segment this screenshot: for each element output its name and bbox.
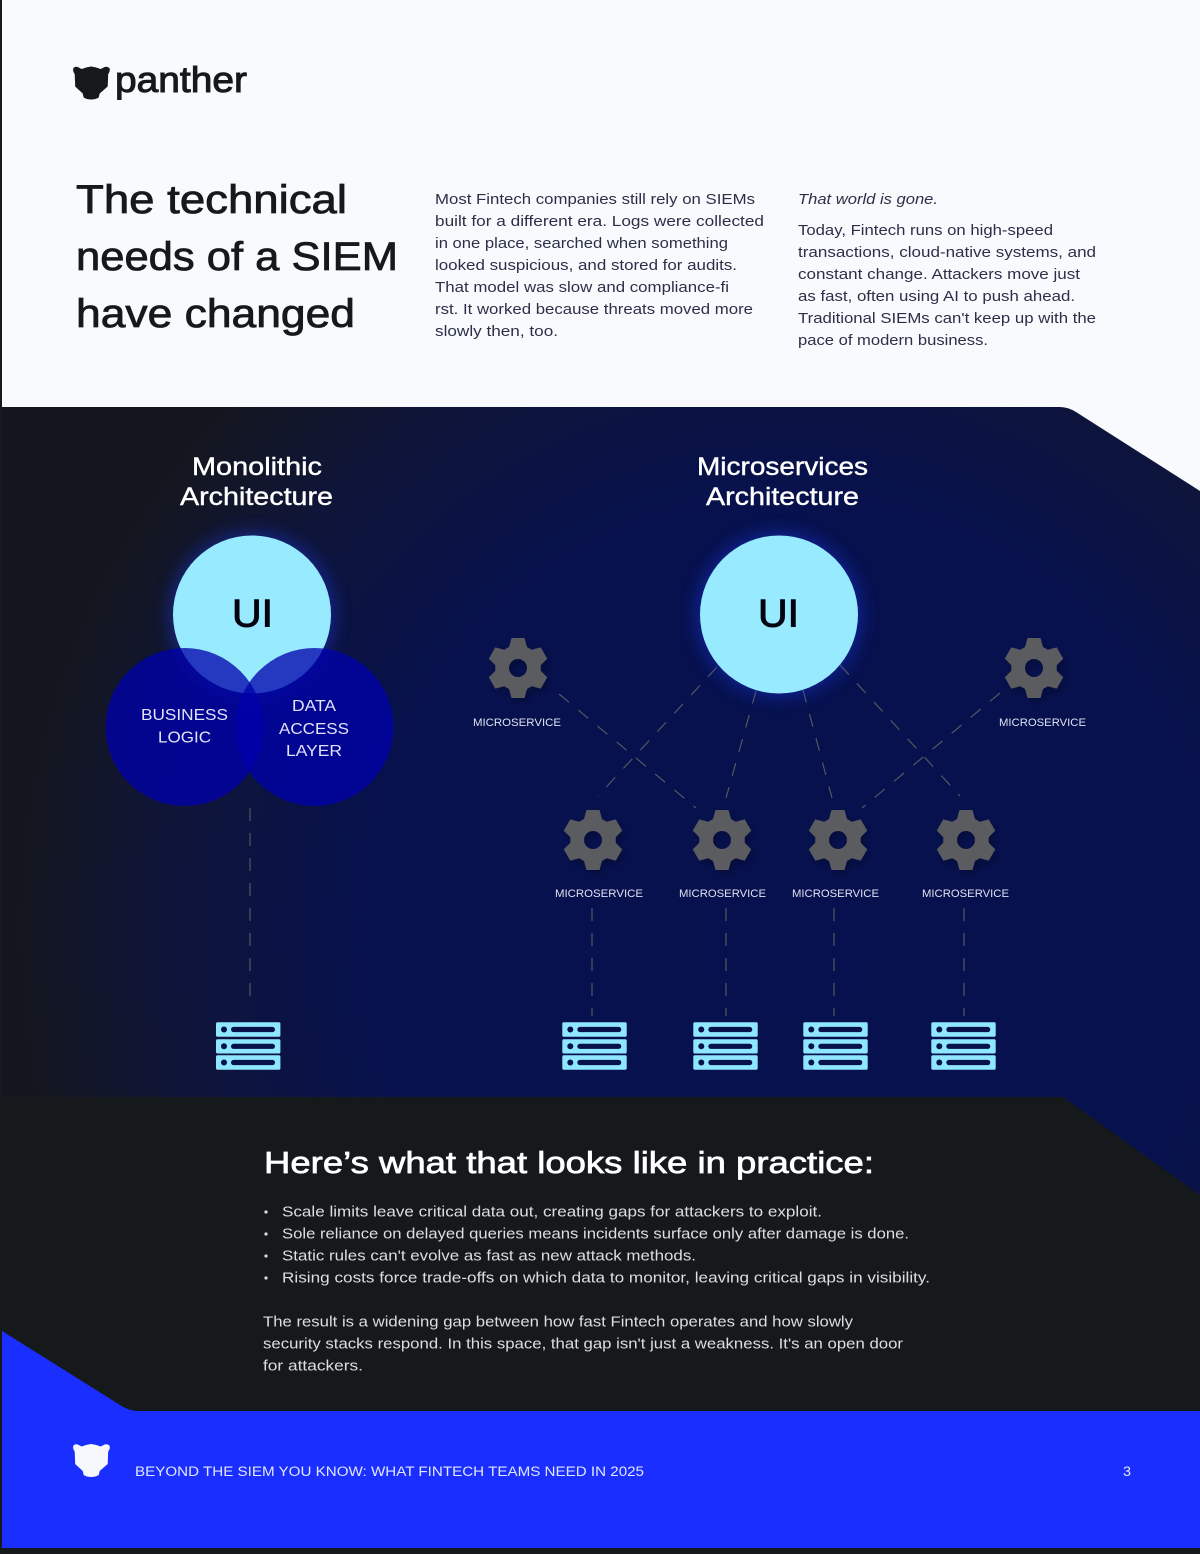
title: The technical (76, 178, 347, 222)
diagram: monolithic venn: LOGIC (158, 730, 211, 746)
panel: architecture diagrams background (2, 407, 1200, 1200)
diagram: monolithic venn: LAYER (286, 743, 342, 760)
diagram: monolithic venn (106, 532, 394, 806)
icons: microservice databases (562, 1022, 996, 1070)
microservice: lower 1: MICROSERVICE (555, 888, 643, 900)
page number: 3 (1123, 1463, 1131, 1479)
text block: the result (263, 1314, 903, 1374)
panel: practice section background (2, 1097, 1200, 1420)
text block: legacy SIEM intro: rst. It worked because threats moved more (435, 301, 753, 318)
diagram: monolithic venn: BUSINESS (141, 707, 228, 724)
diagram: monolithic venn: UI (232, 592, 273, 636)
microservice: lower 2: MICROSERVICE (679, 888, 766, 900)
logo: panther: panther (115, 59, 247, 100)
diagram: monolithic venn: ACCESS (279, 721, 349, 738)
microservice: upper right (999, 638, 1086, 729)
title (76, 178, 398, 336)
text block: that world is gone: as fast, often using AI to push ahead. (798, 288, 1075, 305)
text block: legacy SIEM intro: looked suspicious, and stored for audits. (435, 257, 737, 274)
panel: footer band (2, 1331, 1200, 1548)
text block: legacy SIEM intro: in one place, searched when something (435, 235, 728, 252)
heading: monolithic architecture: Monolithic (192, 453, 322, 481)
heading: microservices architecture: Architecture (706, 483, 859, 511)
list: practice bullets: Scale limits leave critical data out, creating gaps for attackers to exploit. (282, 1204, 822, 1220)
heading: monolithic architecture: Architecture (180, 483, 333, 511)
text block: that world is gone (798, 191, 1096, 349)
microservice: upper left (473, 638, 561, 729)
text block: legacy SIEM intro: slowly then, too. (435, 323, 558, 340)
title: have changed (76, 292, 355, 336)
microservice: lower 3 (792, 810, 879, 900)
list: practice bullets (264, 1204, 930, 1286)
connectors: microservices to databases (592, 908, 964, 1016)
text block: legacy SIEM intro: built for a different era. Logs were collected (435, 213, 764, 230)
microservice: lower 4: MICROSERVICE (922, 888, 1009, 900)
heading: in practice: Here’s what that looks like in practice: (264, 1145, 874, 1180)
text block: the result: security stacks respond. In this space, that gap isn't just a weakness. It's an open door (263, 1336, 903, 1352)
microservice: lower 4 (922, 810, 1009, 900)
heading: monolithic architecture (180, 453, 333, 511)
text block: legacy SIEM intro: That model was slow and compliance-fi (435, 279, 729, 296)
circle: microservices UI: UI (758, 592, 799, 636)
heading: microservices architecture (697, 453, 868, 511)
list: practice bullets: Static rules can't evolve as fast as new attack methods. (282, 1248, 696, 1264)
text block: that world is gone: transactions, cloud-native systems, and (798, 244, 1096, 261)
microservice: lower 2 (679, 810, 766, 900)
text block: that world is gone: Today, Fintech runs on high-speed (798, 222, 1053, 239)
microservice: lower 3: MICROSERVICE (792, 888, 879, 900)
connector: monolith to database (249, 808, 251, 1006)
circle: microservices UI (697, 532, 861, 696)
list: practice bullets: Sole reliance on delayed queries means incidents surface only after damage is done. (282, 1226, 909, 1242)
text block: legacy SIEM intro (435, 191, 764, 340)
microservice: upper right: MICROSERVICE (999, 717, 1086, 729)
text block: that world is gone: That world is gone. (798, 191, 938, 208)
text block: the result: for attackers. (263, 1358, 363, 1374)
diagram: monolithic venn: DATA (292, 698, 336, 715)
text block: that world is gone: pace of modern business. (798, 332, 988, 349)
microservice: upper left: MICROSERVICE (473, 717, 561, 729)
icon: footer panther (73, 1444, 110, 1477)
text block: that world is gone: Traditional SIEMs can't keep up with the (798, 310, 1096, 327)
text block: legacy SIEM intro: Most Fintech companies still rely on SIEMs (435, 191, 755, 208)
footer title: BEYOND THE SIEM YOU KNOW: WHAT FINTECH TEAMS NEED IN 2025 (135, 1464, 644, 1479)
text block: the result: The result is a widening gap between how fast Fintech operates and how slowly (263, 1314, 854, 1330)
icon: monolith database (216, 1022, 280, 1070)
microservice: lower 1 (555, 810, 643, 900)
list: practice bullets: Rising costs force trade-offs on which data to monitor, leaving critical gaps in visibility. (282, 1270, 930, 1286)
title: needs of a SIEM (76, 235, 398, 279)
heading: microservices architecture: Microservices (697, 453, 868, 481)
connectors: microservices network (559, 665, 1000, 808)
text block: that world is gone: constant change. Attackers move just (798, 266, 1081, 283)
